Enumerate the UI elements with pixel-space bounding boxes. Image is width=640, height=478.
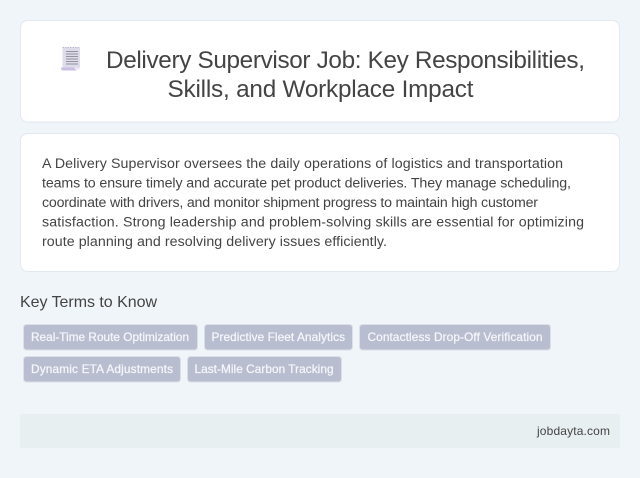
tag: real-time route optimization xyxy=(24,324,198,350)
title text: Delivery Supervisor Job: Key Responsibilities, xyxy=(106,47,585,74)
tag: last-mile carbon tracking xyxy=(188,356,342,382)
tag group: key terms xyxy=(24,324,550,382)
heading: key terms: Key Terms to Know xyxy=(20,294,157,311)
description text: coordinate with drivers, and monitor shipment progress to maintain high customer xyxy=(42,195,538,211)
description text: teams to ensure timely and accurate pet product deliveries. They manage scheduling, xyxy=(42,176,571,192)
tag: dynamic eta adjustments xyxy=(24,356,180,382)
tag: contactless drop-off verification xyxy=(360,324,550,350)
tag: contactless drop-off verification: Contactless Drop-Off Verification xyxy=(368,330,542,344)
tag: last-mile carbon tracking: Last-Mile Carbon Tracking xyxy=(194,362,334,376)
title text: Skills, and Workplace Impact xyxy=(168,76,474,103)
tag: predictive fleet analytics xyxy=(204,324,352,350)
description text: route planning and resolving delivery issues efficiently. xyxy=(42,234,387,250)
tag: real-time route optimization: Real-Time Route Optimization xyxy=(31,330,189,344)
description text xyxy=(42,156,584,250)
description text: satisfaction. Strong leadership and problem-solving skills are essential for optimizing xyxy=(42,214,584,230)
description text: A Delivery Supervisor oversees the daily operations of logistics and transportation xyxy=(42,156,563,172)
tag: predictive fleet analytics: Predictive Fleet Analytics xyxy=(212,330,345,344)
footer xyxy=(20,414,620,448)
panel: title card xyxy=(20,20,620,122)
tag: dynamic eta adjustments: Dynamic ETA Adjustments xyxy=(31,362,173,376)
footer: jobdayta.com xyxy=(536,424,610,438)
panel: description card xyxy=(20,134,620,272)
icon: document scroll xyxy=(61,48,80,70)
title text xyxy=(106,47,585,103)
